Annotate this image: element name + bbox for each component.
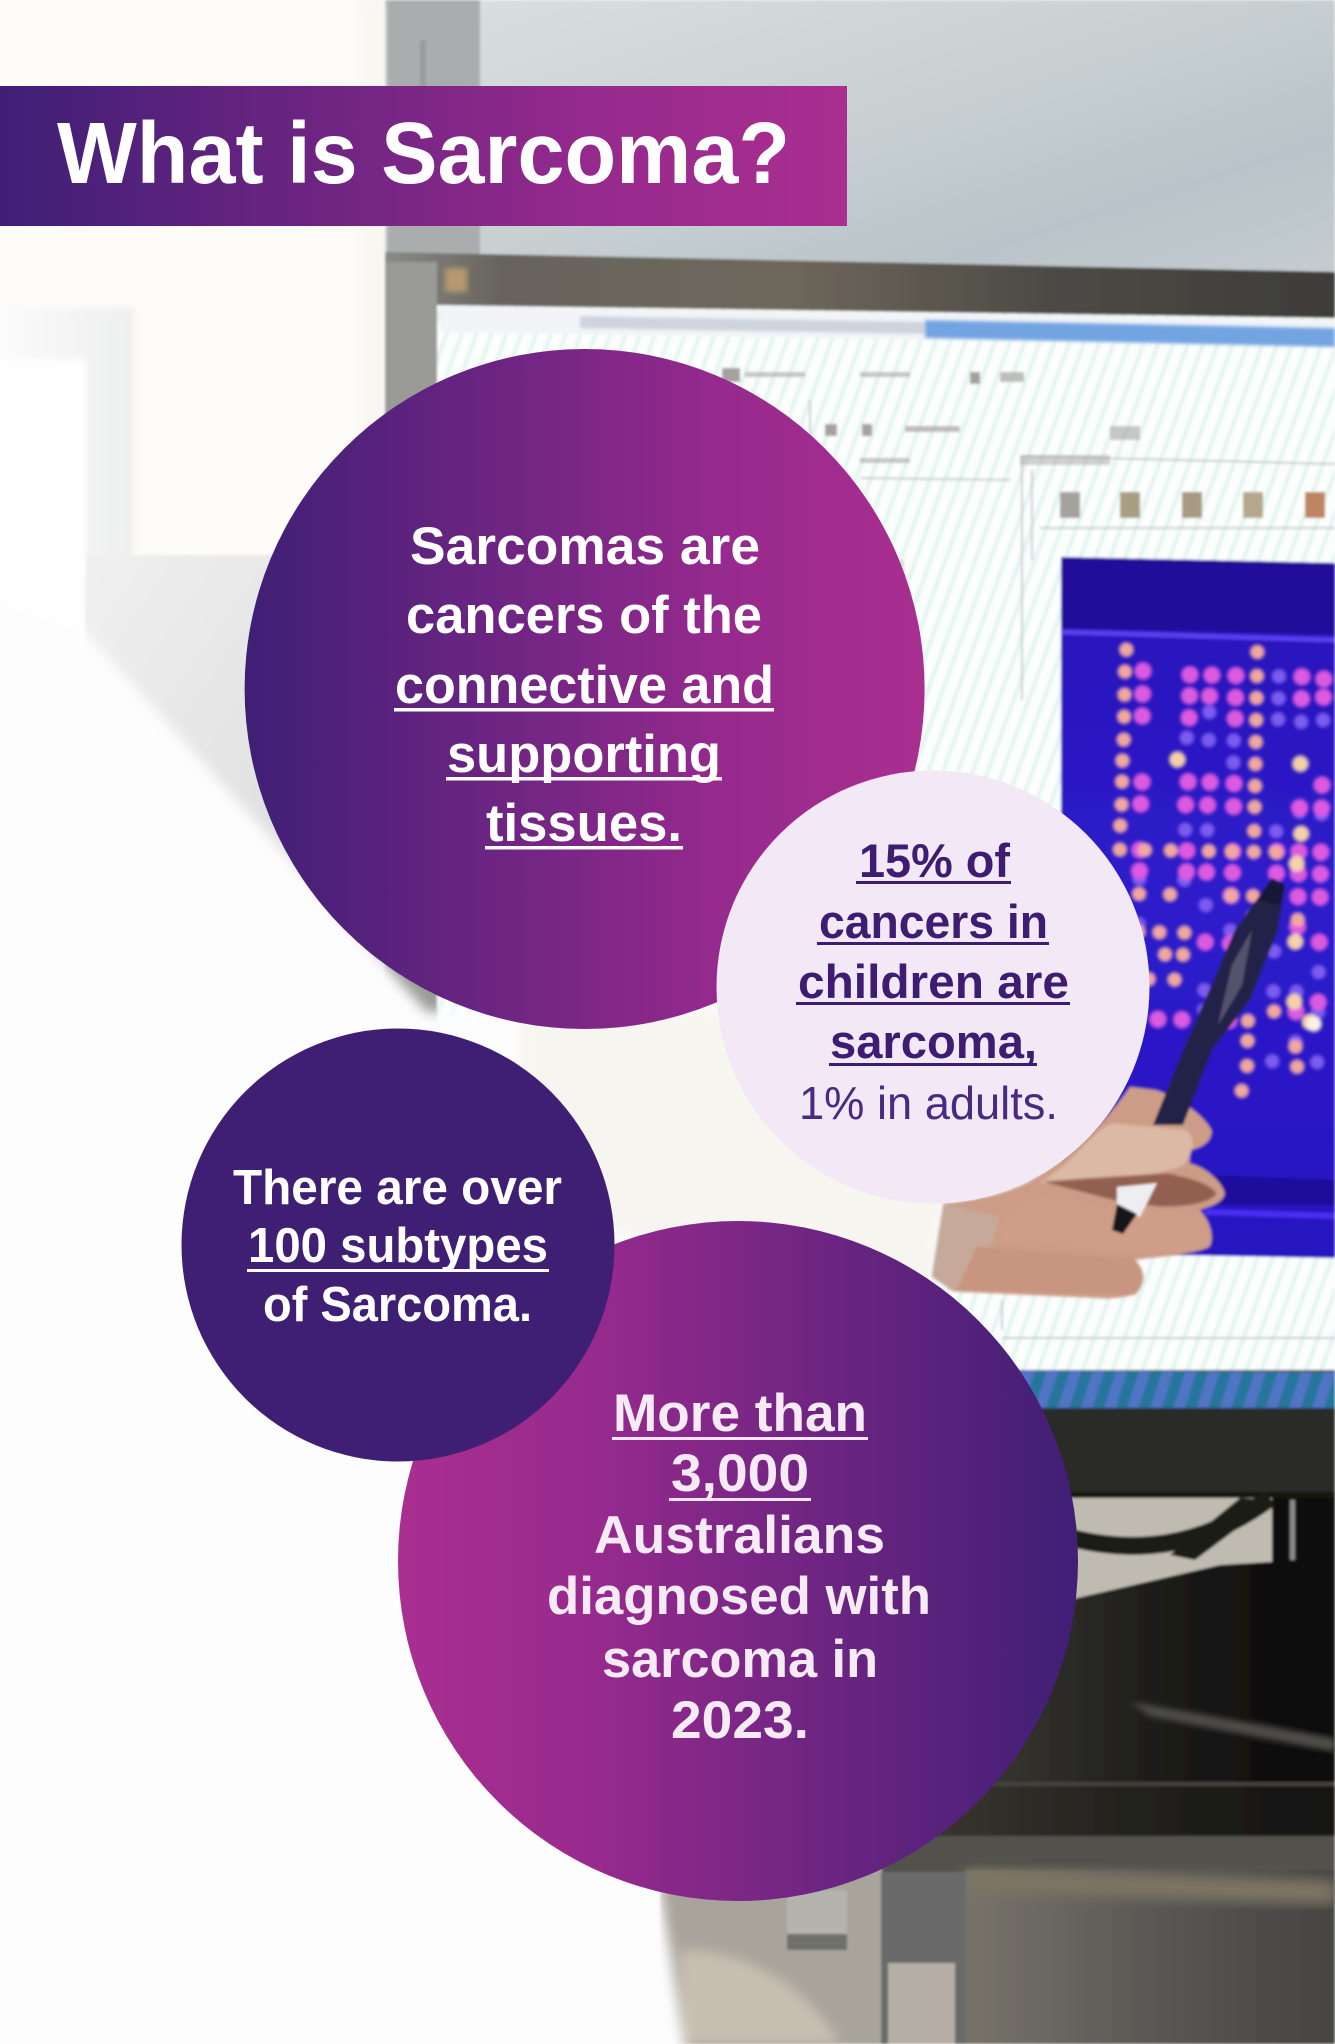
gel spots [1116,650,1324,1092]
background visible behind stand [660,1498,1272,1608]
text: 3,000 Australians diagnosed: sarcoma in [602,1630,878,1689]
text: over 100 subtypes: 100 subtypes [248,1219,548,1273]
monitor screen [437,305,1335,1370]
text: 3,000 Australians diagnosed [547,1384,931,1750]
text: 3,000 Australians diagnosed: More than [613,1384,867,1443]
index finger [1040,1123,1193,1183]
cable [1060,1498,1270,1546]
pen lower end [1117,1183,1157,1217]
text: over 100 subtypes [233,1161,562,1332]
screen toolbars and window frames [810,400,1335,1338]
hand outline [932,1087,1225,1299]
text: definition: tissues. [486,794,682,853]
circle: subtypes [182,1028,614,1462]
monitor stand base [960,1558,1335,1790]
grey wall shadow [86,555,446,1065]
bezel logo [445,268,467,292]
text: 15% of cancers in children: cancers in [819,895,1048,948]
text: definition [394,517,774,853]
text: over 100 subtypes: There are over [233,1161,562,1215]
pale left wall [0,0,385,560]
pen [1153,878,1285,1125]
text: 15% of cancers in children: sarcoma, [830,1015,1037,1068]
window frame on wall [0,308,133,648]
circle: definition of sarcoma [245,349,925,1029]
desk edge [880,1786,1335,1838]
text: definition: Sarcomas are [410,517,760,576]
text: definition: connective and [395,656,774,715]
text: over 100 subtypes: of Sarcoma. [263,1278,532,1332]
circle: 15% statistic [716,770,1150,1204]
text: 3,000 Australians diagnosed: 2023. [671,1691,809,1750]
text: 3,000 Australians diagnosed: 3,000 [671,1444,809,1503]
circle: Australian diagnoses [398,1221,1078,1901]
text: 3,000 Australians diagnosed: Australians [594,1506,885,1565]
hand holding pen [932,878,1285,1299]
lower bezel [660,1408,1335,1494]
text: 15% of cancers in children: 15% of [859,834,1010,887]
dark leg block [881,1872,966,2044]
bracket [787,1890,847,1936]
blue gel image [1061,557,1335,1258]
floor [966,1870,1335,2044]
middle finger [1000,1193,1211,1254]
shadow between fingers [1043,1173,1217,1207]
text: 15% of cancers in children: children are [798,955,1069,1008]
door frame [385,0,480,270]
text: definition: supporting [447,725,721,784]
screen title bar [440,306,1335,346]
text: 3,000 Australians diagnosed: diagnosed with [547,1567,931,1626]
title banner [0,86,847,226]
scientist coat [0,590,943,2044]
monitor bezel [385,252,1335,1500]
text: 15% of cancers in children: 1% in adults. [799,1077,1058,1129]
title text: What is Sarcoma? [57,105,790,202]
wall behind monitor [470,0,1335,275]
text: definition: cancers of the [406,586,762,645]
lower screen band [930,1370,1335,1410]
text: 15% of cancers in children [796,834,1070,1129]
little finger [957,1247,1143,1295]
palm [932,1203,1000,1292]
